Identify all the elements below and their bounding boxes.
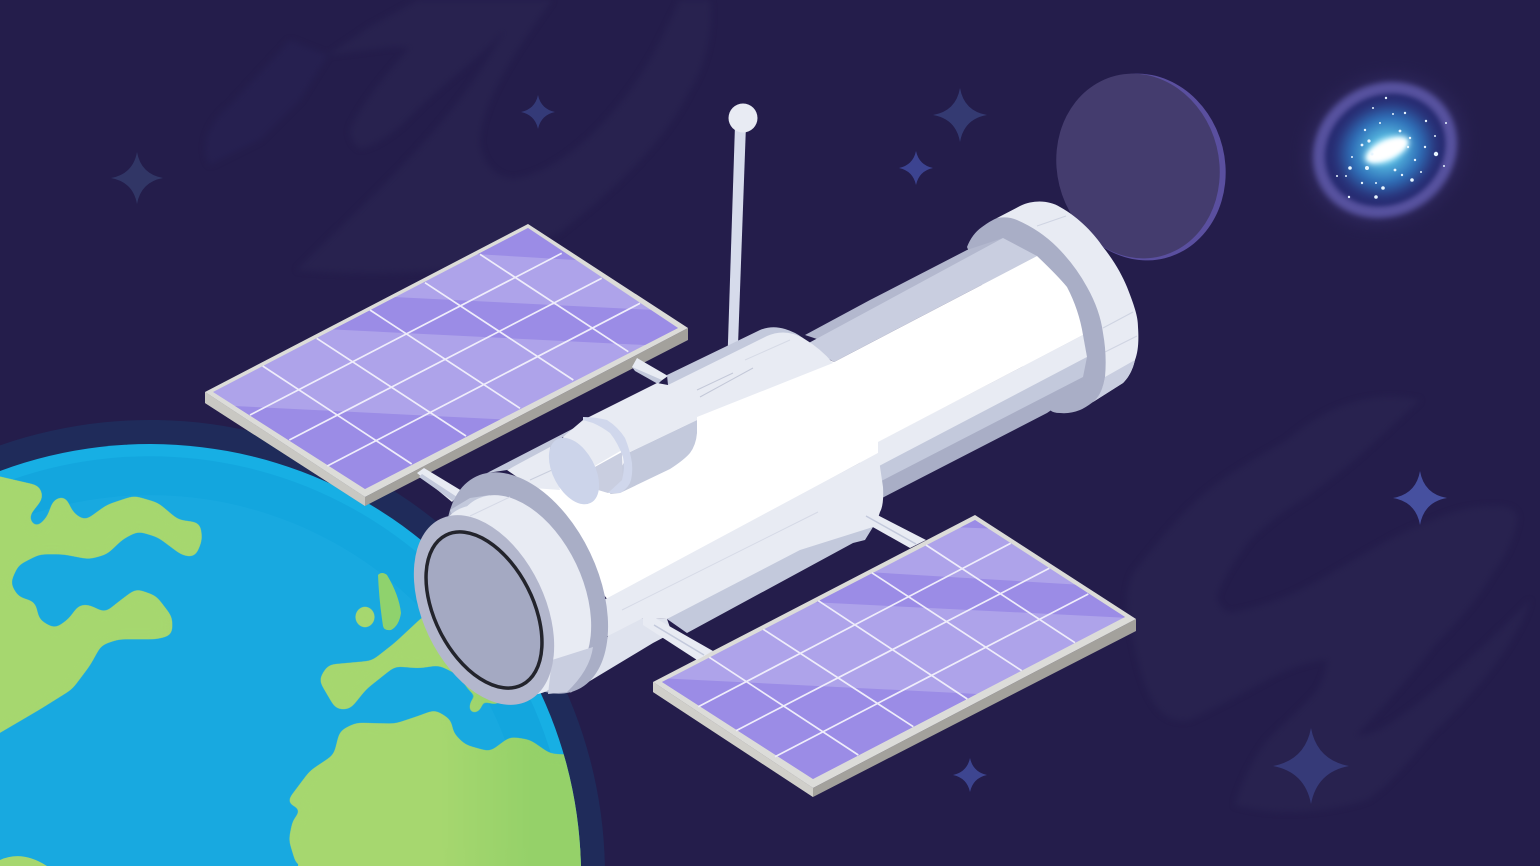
peninsula	[319, 615, 520, 714]
star	[933, 88, 987, 142]
aft ring seams	[1037, 216, 1137, 352]
panel surface	[662, 520, 1125, 779]
continent base	[298, 848, 600, 866]
tube underside	[570, 618, 672, 693]
star	[521, 95, 555, 129]
strut: lower left	[643, 614, 713, 660]
continent: upper left	[0, 470, 202, 750]
instrument cap face	[539, 429, 609, 513]
atmosphere	[0, 420, 605, 866]
instrument module grey	[610, 420, 697, 494]
lower module grey	[667, 515, 873, 633]
tube rear light	[507, 447, 560, 490]
dome seams	[697, 340, 790, 397]
star	[899, 151, 933, 185]
island sliver	[378, 573, 401, 630]
panel grid	[698, 543, 1088, 757]
telescope	[385, 202, 1138, 727]
panel frame side	[205, 328, 688, 506]
panel frame side	[653, 619, 1136, 797]
ocean	[0, 456, 569, 866]
aperture	[402, 513, 566, 707]
instrument cap grey	[593, 452, 623, 493]
panel frame top	[205, 224, 688, 497]
solar panel: lower	[650, 500, 1150, 800]
front disc	[385, 493, 583, 727]
continent: lower right	[286, 710, 600, 866]
antenna	[727, 104, 758, 373]
front ring dark lip	[413, 446, 641, 720]
moon	[1037, 56, 1245, 278]
panel surface	[213, 228, 678, 489]
tube rear grey	[487, 425, 590, 473]
aft ring inner lip	[967, 217, 1106, 413]
panel frame side light	[205, 392, 365, 506]
galaxy	[1275, 44, 1495, 256]
front ring upper shade	[450, 495, 490, 522]
panel shading	[662, 520, 1125, 779]
tube lower light band	[860, 335, 1087, 476]
star	[1393, 471, 1447, 525]
instrument module light	[583, 383, 697, 453]
continent: bottom left	[0, 856, 47, 866]
panel grid	[250, 253, 640, 466]
aft ring outer	[997, 202, 1138, 410]
tube lower grey band	[860, 357, 1087, 492]
island	[355, 606, 375, 628]
dome light	[668, 332, 833, 417]
continents	[0, 470, 600, 866]
star	[1273, 728, 1349, 804]
lower module light	[600, 453, 883, 640]
tube top grey	[805, 238, 1037, 362]
aft ring lower shade	[1093, 360, 1135, 402]
collar seam	[470, 497, 510, 516]
solar panel: upper	[205, 224, 688, 506]
front ring collar shade	[548, 647, 593, 694]
strut: upper left	[417, 468, 462, 502]
strut: lower right	[855, 506, 926, 548]
inner ocean	[0, 495, 530, 866]
panel frame side light	[653, 682, 813, 797]
star	[953, 758, 987, 792]
instrument cap light	[563, 420, 622, 470]
ocean rim	[0, 444, 581, 866]
lower module seam	[622, 512, 818, 610]
panel shading	[235, 228, 678, 489]
tube lower dark band	[860, 377, 1083, 510]
panel frame top	[653, 515, 1136, 788]
front ring collar light	[404, 473, 620, 717]
dome grey strip	[667, 327, 803, 395]
instrument collar	[583, 417, 632, 493]
strut: upper right	[632, 358, 668, 384]
tube white main	[520, 256, 1083, 600]
tube top dark strip	[805, 238, 1003, 350]
rear seams	[530, 470, 552, 480]
earth	[0, 420, 605, 866]
star	[111, 152, 163, 204]
